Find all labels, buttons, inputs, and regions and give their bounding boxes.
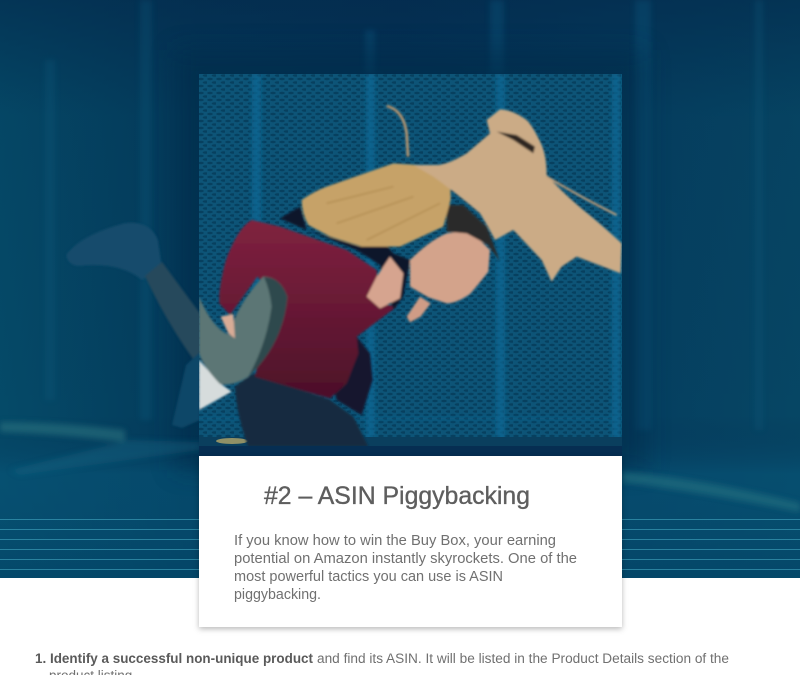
numbered list item (35, 651, 729, 675)
figure: face (410, 230, 490, 303)
figure: man's dark jeans (235, 373, 368, 447)
white text card (199, 456, 622, 627)
intro paragraph (234, 533, 577, 603)
intro paragraph: potential on Amazon instantly skyrockets. One of the (234, 551, 577, 567)
figure: hair (413, 109, 622, 282)
figure: woman's white shoe (199, 360, 232, 410)
numbered list item: and find its ASIN. It will be listed in the Product Details section of the (317, 651, 729, 666)
ghost leg and shoe (66, 223, 205, 428)
figure: dark lower body (334, 336, 374, 416)
figure: man's hair (447, 205, 500, 262)
heading: #2 – ASIN Piggybacking (264, 482, 530, 510)
figure: maroon jacket (219, 220, 397, 398)
photo: piggyback couple (199, 74, 622, 447)
figure: hands (367, 257, 403, 308)
figure: woman's jeans (199, 275, 273, 386)
figure: tan jacket (302, 163, 451, 247)
intro paragraph: piggybacking. (234, 587, 321, 603)
intro paragraph: most powerful tactics you can use is ASIN (234, 569, 503, 585)
numbered list item: 1. Identify a successful non-unique product (35, 651, 314, 666)
figure: black top (280, 207, 410, 310)
intro paragraph: If you know how to win the Buy Box, your earning (234, 533, 556, 549)
horizontal lines (0, 520, 800, 570)
dark band under photo (199, 446, 622, 456)
